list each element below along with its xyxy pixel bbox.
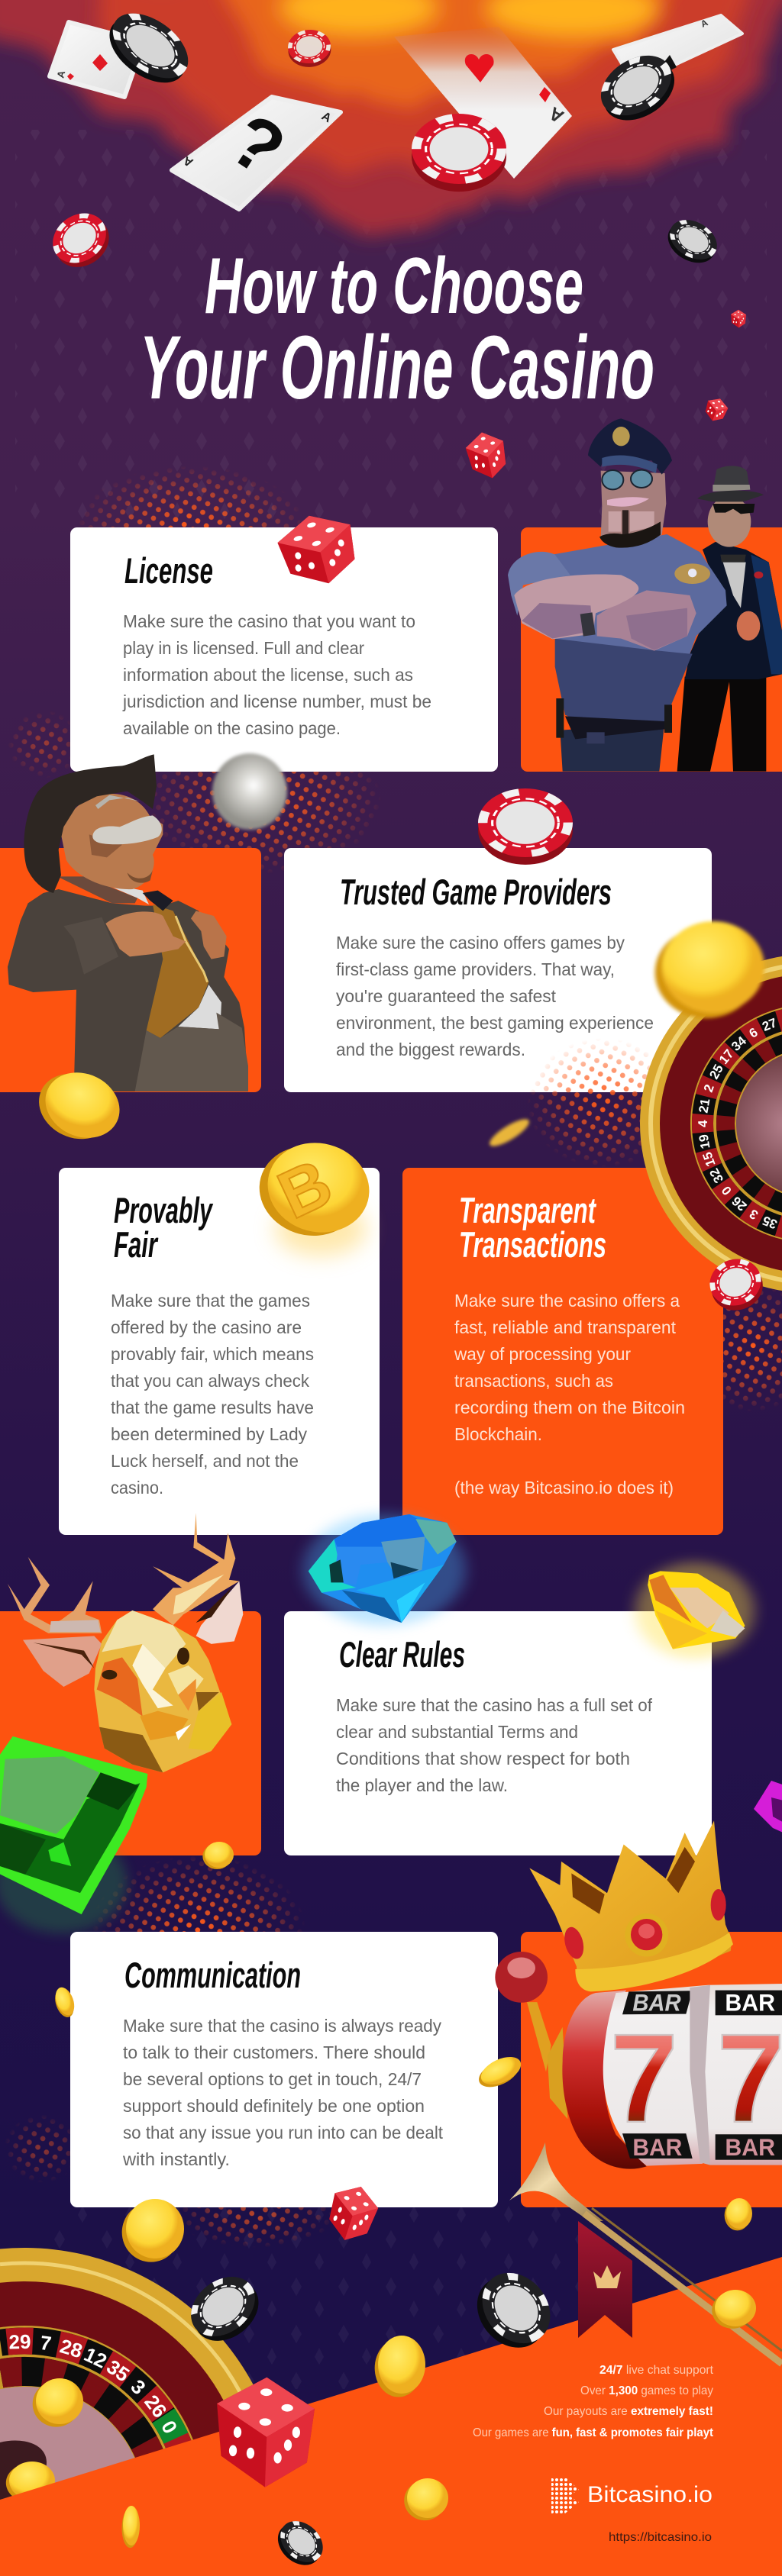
panel: license <box>70 527 498 772</box>
orange diagonal footer <box>0 2257 782 2576</box>
body: transparent transactions <box>454 1291 685 1498</box>
roulette numbers: 12 <box>81 2342 111 2373</box>
heading: trusted game providers: Trusted Game Providers <box>340 872 612 912</box>
left antler <box>8 1557 102 1633</box>
logo: Bitcasino.io: Bitcasino.io <box>587 2482 713 2507</box>
crown <box>529 1820 733 1991</box>
body: transparent transactions: (the way Bitcasino.io does it) <box>454 1478 674 1498</box>
left ear <box>23 1636 102 1687</box>
title <box>140 242 654 418</box>
black chip footer <box>270 2513 331 2574</box>
body: provably fair: casino. <box>111 1478 163 1498</box>
spade ace card: A <box>699 17 709 30</box>
body: communication <box>122 2016 444 2169</box>
body: trusted game providers: you're guaranteed the safest <box>336 986 557 1006</box>
body: provably fair: been determined by Lady <box>111 1424 307 1444</box>
blue diamond <box>302 1514 466 1626</box>
body: provably fair <box>111 1291 314 1498</box>
heading: license: License <box>124 550 213 591</box>
body: transparent transactions: recording them on the Bitcoin <box>454 1398 685 1417</box>
panel: orange stag <box>0 1611 261 1855</box>
yellow gem <box>635 1562 755 1659</box>
body: provably fair: that the game results have <box>111 1398 314 1417</box>
roulette numbers: 4 <box>696 1120 710 1127</box>
body: communication: Make sure that the casino is always ready <box>123 2016 441 2036</box>
roulette numbers: 26 <box>729 1194 749 1214</box>
coin on wheel <box>33 2378 83 2427</box>
reel one: BAR <box>632 2133 682 2161</box>
lever <box>495 1952 567 2119</box>
small red chip <box>286 28 332 69</box>
purple gem <box>754 1781 782 1834</box>
coin by lever <box>474 2052 525 2093</box>
halftone dots <box>4 466 782 2248</box>
bitcoin coin <box>249 1130 380 1256</box>
reel one <box>603 1985 708 2166</box>
body: communication: so that any issue you run into can be dealt <box>123 2123 444 2142</box>
playing card: ace of diamonds: A <box>54 69 67 79</box>
panel: orange slot machine <box>521 1932 782 2207</box>
roulette numbers: 25 <box>706 1062 726 1082</box>
die on license card <box>273 506 364 593</box>
roulette numbers: 6 <box>747 1025 761 1041</box>
big coin below card <box>122 2199 184 2262</box>
belly <box>135 1013 248 1091</box>
coin right <box>725 2198 752 2230</box>
roulette numbers: 32 <box>706 1165 726 1185</box>
black chip right <box>463 2259 564 2362</box>
panel: clear rules <box>284 1611 712 1855</box>
trumpet <box>509 2142 782 2364</box>
black chip small right <box>661 212 724 271</box>
big red chip <box>412 114 506 192</box>
banner <box>578 2221 632 2338</box>
reel two: BAR <box>725 1989 775 2017</box>
moustache <box>92 815 162 844</box>
roulette numbers: 7 <box>39 2331 53 2355</box>
body: trusted game providers: and the biggest rewards. <box>336 1040 525 1059</box>
cuff <box>63 917 118 975</box>
roulette numbers: 15 <box>700 1150 719 1169</box>
small coin on stag panel <box>202 1842 234 1869</box>
coin near card <box>51 1984 79 2020</box>
reel one: 7 <box>610 2008 678 2149</box>
roulette numbers: 19 <box>696 1133 713 1150</box>
roulette numbers: 28 <box>57 2334 85 2362</box>
question mark card: ? <box>215 97 300 192</box>
heading: provably fair <box>114 1190 214 1265</box>
bitcoin coin: B <box>267 1144 343 1233</box>
roulette numbers: 35 <box>761 1213 780 1232</box>
small red chip on wheel <box>703 1252 769 1317</box>
roulette numbers: 35 <box>102 2355 134 2386</box>
roulette numbers: 3 <box>127 2374 150 2399</box>
eyebrow <box>95 795 140 809</box>
roulette numbers: 26 <box>140 2391 172 2422</box>
body: trusted game providers <box>336 933 654 1059</box>
coin footer <box>404 2478 448 2520</box>
body: license: jurisdiction and license number, must be <box>122 692 431 711</box>
body: provably fair: Make sure that the games <box>111 1291 310 1311</box>
body: license: Make sure the casino that you want to <box>123 611 415 631</box>
thin coin footer <box>121 2506 140 2548</box>
body: transparent transactions: fast, reliable and transparent <box>454 1317 677 1337</box>
hat <box>24 754 157 893</box>
face <box>61 794 163 889</box>
body: provably fair: offered by the casino are <box>111 1317 302 1337</box>
body: trusted game providers: first-class game providers. That way, <box>336 959 615 979</box>
body: clear rules: Make sure that the casino has a full set of <box>336 1695 653 1715</box>
footer benefit list: 24/7 live chat support <box>599 2364 714 2377</box>
body: license <box>122 611 431 738</box>
body: transparent transactions: Blockchain. <box>454 1424 542 1444</box>
black chip <box>98 0 200 95</box>
roulette numbers <box>8 2330 182 2437</box>
slot machine <box>495 1952 782 2169</box>
heading: communication: Communication <box>124 1955 301 1995</box>
coin under cowboy <box>28 1059 131 1153</box>
body: license: information about the license, such as <box>123 665 413 685</box>
body: transparent transactions: Make sure the casino offers a <box>454 1291 680 1311</box>
die centre <box>463 428 510 482</box>
question mark card: A <box>181 153 196 169</box>
coat <box>8 889 248 1091</box>
footer benefit list <box>473 2364 714 2439</box>
blurred gold coin <box>655 921 764 1018</box>
roulette numbers <box>696 1015 780 1232</box>
reel side <box>562 1991 647 2169</box>
body: provably fair: Luck herself, and not the <box>111 1451 299 1471</box>
collar <box>102 883 149 904</box>
footer benefit list: Over 1,300 games to play <box>580 2384 713 2397</box>
body: transparent transactions: transactions, such as <box>454 1371 613 1391</box>
question mark card: A <box>319 110 334 125</box>
panel: orange cowboy <box>0 848 261 1092</box>
body: license: available on the casino page. <box>123 718 341 738</box>
body: provably fair: that you can always check <box>111 1371 309 1391</box>
body: communication: be several options to get in touch, 24/7 <box>123 2069 422 2089</box>
heading: provably fair: Fair <box>114 1224 159 1265</box>
roulette numbers: 17 <box>716 1046 737 1067</box>
red chip left <box>43 203 118 277</box>
coin on trumpet <box>712 2290 756 2329</box>
black chip right <box>590 44 685 133</box>
blurred small coin <box>486 1114 532 1151</box>
black chip left <box>179 2265 270 2353</box>
body: trusted game providers: environment, the best gaming experience <box>336 1013 654 1033</box>
body: clear rules <box>336 1695 653 1795</box>
footer benefit list: Our games are fun, fast & promotes fair playt <box>473 2426 714 2439</box>
question mark card <box>172 97 341 209</box>
die below card <box>322 2180 383 2247</box>
body: communication: to talk to their customers. There should <box>123 2042 425 2062</box>
die right <box>702 395 730 424</box>
body: clear rules: Conditions that show respect for both <box>336 1749 630 1768</box>
panel: orange police <box>521 527 782 772</box>
hands <box>105 911 186 956</box>
character: man in tuxedo <box>677 466 782 772</box>
body: communication: support should definitely be one option <box>123 2096 425 2116</box>
body: communication: with instantly. <box>122 2149 230 2169</box>
shirt <box>178 985 221 1029</box>
body: clear rules: the player and the law. <box>336 1775 508 1795</box>
logo: Bitcasino.io <box>551 2477 713 2513</box>
reel two <box>690 1984 782 2165</box>
heading: transparent transactions: Transactions <box>459 1224 606 1265</box>
heart ace card: A <box>545 102 567 127</box>
roulette numbers: 27 <box>760 1015 779 1034</box>
coin on boundary <box>375 2336 425 2397</box>
crown icon <box>593 2265 621 2288</box>
body: clear rules: clear and substantial Terms and <box>336 1722 578 1742</box>
fire explosion <box>0 0 782 237</box>
roulette numbers: 21 <box>696 1098 713 1114</box>
small die <box>731 310 746 327</box>
character: police officer <box>508 418 727 772</box>
pearl ball <box>212 753 287 830</box>
red chip above trusted card <box>478 788 573 865</box>
body: transparent transactions: way of processing your <box>454 1344 631 1364</box>
character: cowboy <box>8 754 248 1091</box>
reel one: BAR <box>632 1989 681 2017</box>
roulette numbers: 0 <box>719 1183 735 1198</box>
body: license: play in is licensed. Full and clear <box>123 638 364 658</box>
right ear <box>196 1581 243 1644</box>
roulette numbers: 0 <box>157 2416 182 2437</box>
vest <box>147 904 208 1038</box>
panel: communication <box>70 1932 498 2207</box>
roulette wheel bottom left <box>0 2248 284 2576</box>
roulette numbers: 34 <box>729 1033 749 1054</box>
playing card: ace of diamonds <box>50 22 144 97</box>
logo mark <box>551 2477 579 2513</box>
roulette numbers: 29 <box>8 2330 31 2353</box>
right antler <box>153 1513 239 1625</box>
footer url: https://bitcasino.io <box>609 2531 712 2544</box>
body: trusted game providers: Make sure the casino offers games by <box>336 933 625 953</box>
title: How to Choose <box>205 242 583 330</box>
head <box>94 1610 231 1772</box>
panel: trusted game providers <box>284 848 712 1092</box>
halftone on trusted card <box>530 1040 653 1165</box>
green gem <box>0 1736 147 1933</box>
footer benefit list: Our payouts are extremely fast! <box>544 2405 713 2418</box>
stag head <box>8 1513 243 1772</box>
big red die <box>214 2375 315 2489</box>
roulette numbers: 3 <box>747 1206 761 1223</box>
roulette wheel right <box>640 954 782 1293</box>
heading: provably fair: Provably <box>114 1190 214 1230</box>
heading: transparent transactions: Transparent <box>459 1190 597 1230</box>
roulette numbers: 2 <box>701 1082 717 1095</box>
spade ace card <box>613 15 742 84</box>
panel: transparent transactions <box>402 1168 723 1535</box>
heading: clear rules: Clear Rules <box>339 1634 465 1675</box>
heart ace card <box>394 27 572 179</box>
coin lower wheel <box>6 2462 55 2502</box>
reel two: BAR <box>725 2133 775 2161</box>
panel: provably fair <box>59 1168 380 1535</box>
heading: transparent transactions <box>459 1190 606 1265</box>
body: provably fair: provably fair, which means <box>111 1344 314 1364</box>
